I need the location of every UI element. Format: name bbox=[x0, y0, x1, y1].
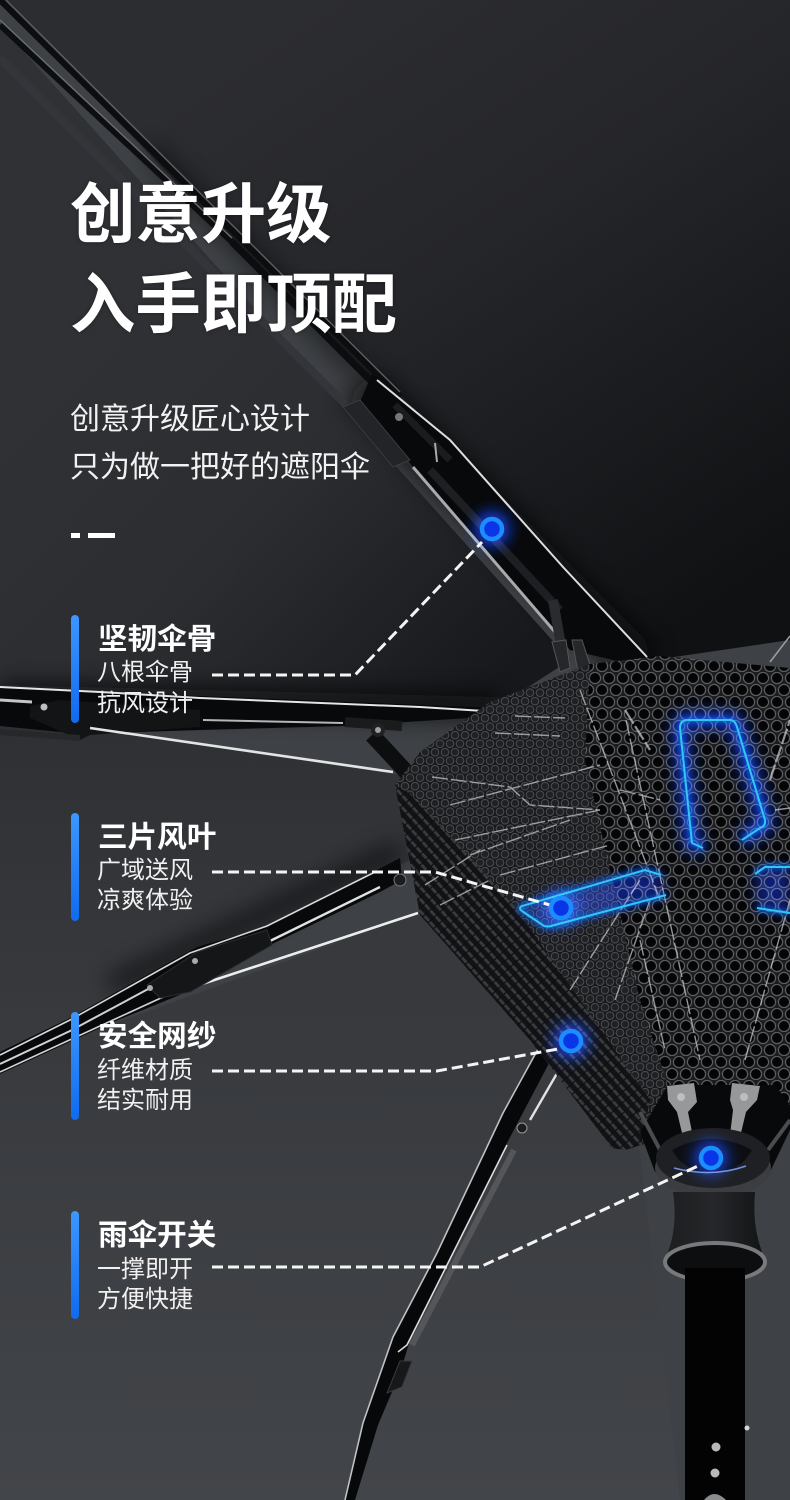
feature: safety mesh: 结实耐用 bbox=[97, 1087, 193, 1114]
rib shadows bbox=[0, 150, 640, 985]
title: 创意升级 bbox=[70, 178, 332, 251]
leader line: mesh bbox=[212, 1049, 558, 1071]
handle: neck bbox=[668, 1192, 762, 1252]
feature: fan blades bbox=[71, 813, 216, 921]
feature: umbrella switch: 方便快捷 bbox=[97, 1286, 193, 1313]
marker dot: ribs bbox=[474, 511, 510, 547]
leader line: switch bbox=[212, 1165, 700, 1267]
marker dot: fan blades bbox=[543, 890, 579, 926]
feature: safety mesh: 安全网纱 bbox=[98, 1020, 216, 1053]
feature: fan blades: 三片风叶 bbox=[98, 821, 216, 854]
marker dot: mesh bbox=[553, 1023, 589, 1059]
feature: safety mesh: 纤维材质 bbox=[97, 1057, 193, 1084]
feature: safety mesh bbox=[71, 1012, 216, 1120]
rib: horizontal left bbox=[0, 687, 500, 778]
handle: crown hub with clips bbox=[640, 1083, 790, 1500]
leader line: fan blades bbox=[212, 872, 550, 905]
fan blade: top bbox=[680, 720, 765, 848]
feature: ribs: 抗风设计 bbox=[97, 690, 193, 717]
leader line: ribs bbox=[212, 542, 482, 675]
rib: lower left bbox=[0, 858, 418, 1074]
feature: ribs: 坚韧伞骨 bbox=[98, 623, 216, 656]
title bbox=[70, 178, 397, 341]
subtitle text bbox=[70, 403, 370, 484]
rib: bottom bbox=[345, 1040, 563, 1500]
feature: umbrella switch: 雨伞开关 bbox=[98, 1219, 216, 1252]
net canopy: mesh bbox=[380, 650, 790, 1160]
feature: fan blades: 广域送风 bbox=[97, 857, 193, 884]
mesh: fine left section bbox=[395, 664, 690, 1152]
handle: metal clip left bbox=[667, 1083, 697, 1137]
feature: ribs: 八根伞骨 bbox=[97, 659, 193, 686]
feature: umbrella switch bbox=[71, 1211, 216, 1319]
mesh: internal wires bbox=[425, 690, 790, 1060]
feature: ribs bbox=[71, 615, 216, 723]
short dash divider bbox=[71, 533, 115, 538]
subtitle text: 创意升级匠心设计 bbox=[70, 403, 310, 436]
handle: black shaft bbox=[685, 1268, 745, 1500]
marker dot: switch bbox=[693, 1140, 729, 1176]
fan blade: left bbox=[520, 870, 666, 926]
mesh: carbon edge band bbox=[395, 785, 650, 1152]
rib: upper left bbox=[0, 0, 790, 672]
feature: fan blades: 凉爽体验 bbox=[97, 887, 193, 914]
handle: metal clip right bbox=[730, 1083, 760, 1137]
fan blade: right bbox=[755, 867, 790, 913]
subtitle text: 只为做一把好的遮阳伞 bbox=[70, 451, 370, 484]
feature: umbrella switch: 一撑即开 bbox=[97, 1256, 193, 1283]
title: 入手即顶配 bbox=[70, 268, 397, 341]
